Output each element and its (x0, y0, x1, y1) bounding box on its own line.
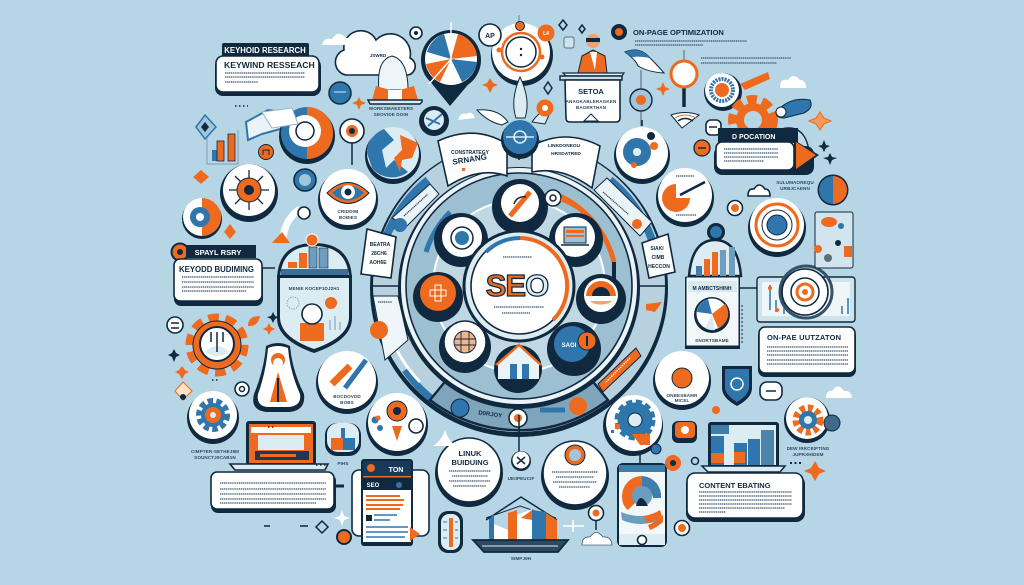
icon: orange tool badge (694, 140, 710, 156)
icon: sparkle white (334, 510, 350, 526)
icon: bird (625, 50, 664, 73)
icon: small orange dots around phone (665, 455, 698, 471)
caption under chart: SIMPJ9H (511, 556, 532, 561)
icon: person at podium (560, 34, 624, 80)
wheel icon: gauge right (576, 274, 626, 324)
caption under gear (191, 449, 239, 460)
wheel icon: target upper left (434, 213, 488, 267)
caption: M AMBCTSHINH (693, 286, 732, 292)
panel: podium text (565, 80, 620, 122)
heading: CONTENT EBATING (699, 481, 771, 490)
label bar: KEYHOID RESEARCH (224, 46, 306, 55)
icon: orange sparkle (263, 323, 275, 335)
book left text: CONSTRATEGY (451, 150, 490, 156)
segment card lower left (370, 296, 408, 360)
label bar: D POCATION (732, 134, 775, 141)
icon: orange mini flower (712, 406, 720, 414)
icon: diamonds (559, 20, 585, 33)
panel: podium text: BAGERTHAN (576, 105, 607, 110)
icon: small badge (235, 382, 249, 396)
icon: eye circle (318, 169, 378, 230)
caption right of pie: URBJCAENN (780, 186, 810, 191)
laptop with bars (702, 422, 785, 472)
heading: KEYWIND RESSEACH (224, 60, 315, 70)
orange banner lower right (598, 348, 641, 392)
icon: pencil circle: BOBS (340, 400, 354, 405)
icon: white cloud right (826, 386, 852, 398)
caption right of pie: SULUMAOREQU (776, 180, 814, 185)
icon: house chart (473, 497, 568, 552)
icon: small server (564, 37, 574, 48)
small cloud near caption (748, 185, 770, 196)
caption under gear: SOUNCTJ0CAB1N (194, 455, 236, 460)
caption under far right gear (787, 446, 830, 457)
wheel icon: laptop upper right (549, 213, 603, 267)
icon: speech bubble top (479, 24, 501, 46)
panel: circle text right of link (541, 441, 609, 510)
icon: blue pill (776, 99, 811, 118)
segment card right (642, 234, 675, 278)
icon: speech bubble (706, 120, 721, 135)
heading block: on-page optimization: ON-PAGE OPTIMIZATION (633, 28, 724, 37)
icon: speech bubble orange (672, 421, 697, 443)
wheel icon: search badge lower right: SAGI (562, 343, 577, 349)
icon: pencil circle: BOCDOVDD (333, 394, 361, 399)
caption right of pie (776, 180, 814, 191)
icon: gear circle (603, 395, 663, 456)
icon: orange gear (734, 101, 772, 139)
icon: target wheel top (491, 23, 553, 86)
panel: open book: HRSDATRED (551, 151, 581, 157)
icon: orange sparkle right (809, 112, 831, 130)
icon: gear circle lower left (187, 391, 239, 444)
icon: orange pin (516, 15, 524, 30)
icon: blue dial (707, 223, 725, 241)
icon: small face badge (167, 317, 183, 333)
decorative dots (212, 106, 326, 465)
wheel icon: pencil top (492, 179, 548, 235)
icon: pie circle right lower: ONBESBAMR (666, 393, 698, 398)
icon: pie with pointer top right of wheel (656, 168, 714, 227)
icon: small pin and cloud (582, 506, 612, 545)
icon: gear circle far right (784, 397, 840, 443)
icon: target bubble circle (366, 393, 428, 456)
icon: orange kite (193, 170, 209, 184)
icon: orange badge (538, 24, 554, 42)
icon: book and donut (246, 107, 335, 164)
caption under cloud: WORKSMAESTERS (369, 106, 413, 111)
icon: dark diamond near leaves (544, 82, 552, 94)
pie chart small (818, 174, 848, 206)
panel: link building (435, 438, 503, 507)
panel: flask with pie chart (685, 240, 757, 349)
icon: orange sparkle (656, 82, 670, 96)
icon: compass pin (421, 22, 481, 106)
icon: pencil circle (316, 351, 378, 414)
icon: diamond (196, 115, 216, 139)
icon: eye circle: BOBIES (339, 215, 357, 220)
icon: target rings (748, 198, 806, 257)
icon: connector badge (508, 415, 534, 481)
icon: orange star (352, 97, 366, 110)
small dial on ring top right (545, 190, 584, 212)
caption under far right gear: JUPRXHIDEM (792, 452, 824, 457)
icon: bell flask (253, 343, 304, 412)
icon: orange star small (175, 366, 189, 379)
segment card upper left (392, 184, 439, 232)
icon: cloud with person (322, 31, 422, 104)
icon: globe (365, 127, 421, 184)
icon: dark sparkle small (267, 312, 279, 323)
icon: orange leaf (248, 316, 260, 326)
panel: on-page utilization (757, 266, 856, 377)
icon: eye circle: CRIDD0B (337, 209, 359, 214)
bar chart (207, 130, 238, 164)
panel: content rating (686, 422, 805, 522)
caption under gear: CIMPTER-SETHEJ8M (191, 449, 239, 454)
bottom segment icons (451, 397, 587, 427)
panel: shield with chart (277, 243, 352, 353)
icon: puzzle (325, 423, 361, 456)
small cloud left of book (458, 113, 475, 120)
icon: orange circle (336, 529, 352, 545)
document header: TON (389, 467, 403, 474)
icon: cloud with person: JSWRD (370, 53, 387, 58)
icon: pie circle right lower (653, 351, 711, 410)
icon: orange ring near leaves (536, 100, 554, 116)
panel: link building: BUIDUING (451, 458, 489, 467)
caption: MENIE KOCEP1DJ2H1 (289, 286, 340, 291)
icon: top leaves and hub (477, 77, 552, 125)
bird marker right of wheel (646, 302, 662, 312)
panel: podium text: SETOA (578, 87, 604, 96)
dashes bottom left (264, 525, 308, 527)
icon: dark sparkle (168, 349, 180, 362)
caption under puzzle: PIHS (337, 461, 349, 466)
heading block: on-page optimization (611, 24, 791, 63)
icon: thermometer (438, 511, 463, 553)
icon: dark diamond (316, 521, 328, 533)
document SEO strip: SEO (367, 483, 380, 489)
panel: assorted mini icons (814, 212, 853, 268)
icon: sun eye (220, 164, 278, 222)
segment card left: 28CH6 (371, 251, 387, 257)
segment card right: SIAKI (650, 246, 664, 252)
bottom segment icons: D0RJOY (478, 410, 502, 420)
icon: gear badge with plane (704, 72, 770, 111)
icon: orange star right (804, 461, 826, 481)
icon: connector arm (272, 207, 310, 243)
wheel icon: house bottom (494, 345, 542, 393)
panel: laptop with text box (211, 421, 344, 513)
chart screen (757, 266, 855, 322)
icon: magnifier (671, 50, 697, 107)
dots near star (790, 462, 802, 464)
caption under far right gear: DEW IRKCEIFTING (787, 446, 830, 451)
SEO centre badge: SEO (486, 268, 548, 303)
icon: big orange gear (191, 319, 243, 371)
icon: small dial top (410, 27, 422, 39)
laptop (230, 421, 328, 470)
book right text: LINKDONEOU (548, 143, 581, 149)
orange badge above shield (306, 234, 318, 246)
icon: speech bubble (760, 382, 782, 400)
central SEO wheel (361, 134, 675, 437)
icon: orange circle (258, 144, 274, 160)
icon: small eye with pin (340, 119, 364, 165)
panel: flask with pie chart: SNORTSBAME (695, 338, 729, 343)
heading: ON-PAE UUTZATON (767, 333, 841, 342)
icon: shield badge (722, 366, 752, 406)
icon: wifi (671, 112, 699, 128)
segment card right: HECCON (648, 264, 670, 270)
icon: central hub dial (501, 120, 539, 159)
segment card left (361, 229, 396, 278)
panel: podium text: ANAGKABLERAGKEN (566, 99, 617, 104)
segment card left: BEATRA (370, 242, 391, 248)
icon: cloud (780, 76, 806, 88)
panel: open book (438, 133, 600, 188)
segment card upper right (594, 178, 652, 236)
wheel icon: orange package left (413, 272, 463, 322)
icon: small colored dial (728, 200, 742, 216)
caption under cloud: SEOVIDE DOIN (374, 112, 409, 117)
icons: sparkles right (818, 140, 837, 165)
icon: connector badge: UEIIPEUCIF (508, 476, 534, 481)
icon: gear dial (182, 198, 222, 239)
panel: keyword building (170, 242, 275, 306)
icon: pie circle right lower: MICEL (675, 398, 689, 403)
icon: orange badge: L4 (543, 31, 549, 37)
panel: d pocation callout (714, 128, 819, 175)
SEO centre badge (464, 231, 574, 341)
icon: orange star left (482, 78, 498, 93)
label bar: SPAYL RSRY (195, 248, 241, 257)
caption under cloud (369, 106, 413, 117)
segment card right: CIMB (652, 255, 665, 261)
heading: KEYODD BUDIMING (179, 265, 254, 274)
wheel icon: search badge lower right (547, 322, 601, 376)
icon: gear circle (614, 120, 670, 184)
icon: orange ring badge (674, 520, 690, 536)
icon: blue badge (329, 82, 351, 104)
icon: small blue ring (294, 169, 316, 191)
panel: link building: LINUK (459, 449, 482, 458)
icon: blue badge (630, 70, 652, 126)
icon: orange diamond (224, 224, 236, 239)
panel: keyword research (215, 43, 321, 96)
icon: speech bubble top: AP (485, 33, 495, 40)
icon: cloud cap left of link building (433, 430, 456, 446)
icon: dark dial (419, 106, 449, 136)
panel: document (352, 459, 429, 546)
sparkle plane near cloud (563, 520, 584, 532)
icon: kite bottom left (175, 382, 192, 400)
panel: open book: SRNANG (452, 152, 487, 167)
wheel icon: grid globe lower left (439, 321, 491, 373)
panel: phone (617, 452, 667, 547)
segment card left: AOH6E (369, 260, 387, 266)
